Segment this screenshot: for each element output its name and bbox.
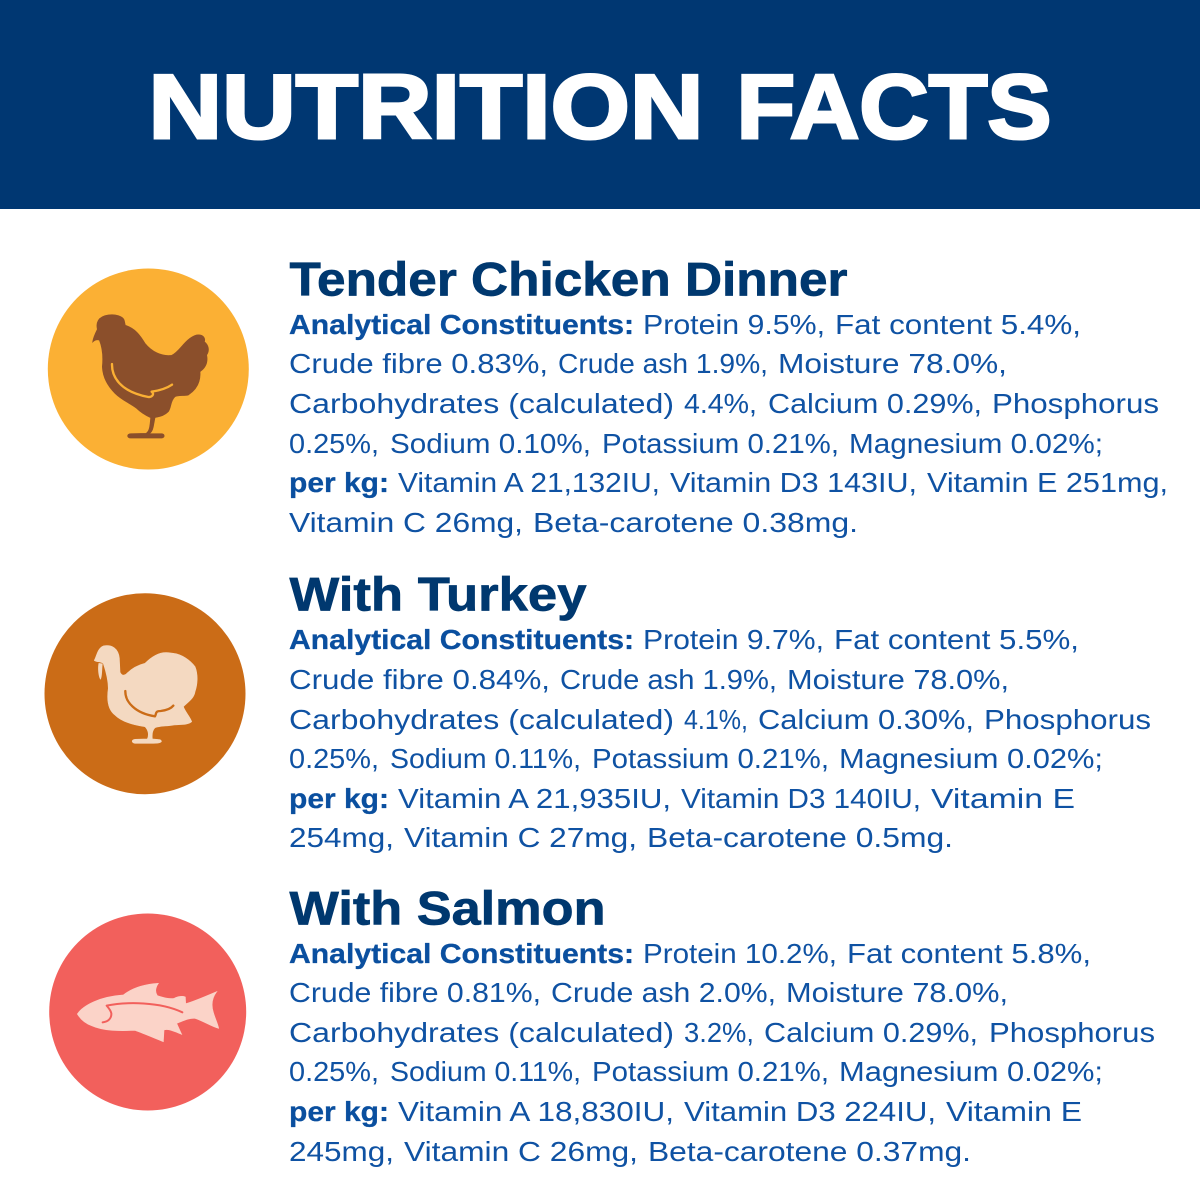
text block: chicken constituents: 4.4%,	[684, 388, 757, 419]
text block: turkey constituents: Vitamin D3 140IU,	[681, 783, 921, 814]
text block: salmon constituents: Calcium 0.29%,	[764, 1017, 978, 1048]
text block: salmon constituents	[289, 938, 1155, 1167]
text block: chicken constituents: Beta-carotene 0.38mg.	[533, 507, 858, 538]
text block: salmon constituents: Potassium 0.21%,	[592, 1056, 829, 1087]
text block: chicken constituents: Vitamin D3 143IU,	[670, 467, 917, 498]
text block: salmon constituents: 3.2%,	[684, 1017, 754, 1048]
text block: salmon constituents: Sodium 0.11%,	[390, 1056, 581, 1087]
text block: turkey constituents: Carbohydrates (calculated)	[289, 704, 674, 735]
text block: chicken constituents: 0.25%,	[289, 428, 379, 459]
text block: turkey constituents: Beta-carotene 0.5mg.	[647, 822, 953, 853]
text block: salmon constituents: Vitamin D3 224IU,	[684, 1096, 936, 1127]
text block: turkey constituents: Phosphorus	[984, 704, 1151, 735]
text block: chicken constituents: Crude ash 1.9%,	[558, 348, 768, 379]
text block: turkey constituents: Vitamin E	[931, 783, 1075, 814]
text block: turkey constituents: Crude fibre 0.84%,	[289, 664, 550, 695]
text block: turkey constituents: Potassium 0.21%,	[592, 743, 829, 774]
title	[148, 57, 1052, 158]
text block: turkey constituents: per kg:	[289, 783, 389, 814]
text block: chicken constituents	[289, 309, 1168, 538]
panel: with turkey	[289, 568, 1151, 853]
text block: turkey constituents: Protein 9.7%,	[643, 624, 824, 655]
title: FACTS	[736, 57, 1052, 158]
text block: turkey constituents: 254mg,	[289, 822, 394, 853]
text block: chicken constituents: Potassium 0.21%,	[602, 428, 839, 459]
text block: turkey constituents: 4.1%,	[684, 704, 748, 735]
icon: salmon	[49, 914, 246, 1110]
text block: chicken constituents: Magnesium 0.02%;	[849, 428, 1103, 459]
text block: turkey constituents: Moisture 78.0%,	[787, 664, 1009, 695]
text block: turkey constituents	[289, 624, 1151, 853]
text block: salmon constituents: Crude ash 2.0%,	[551, 977, 776, 1008]
text block: salmon constituents: Carbohydrates (calculated)	[289, 1017, 674, 1048]
text block: salmon constituents: 0.25%,	[289, 1056, 379, 1087]
panel: tender chicken dinner	[289, 252, 1168, 538]
text block: turkey constituents: 0.25%,	[289, 743, 379, 774]
heading: turkey: With Turkey	[290, 568, 586, 620]
text block: chicken constituents: Vitamin E 251mg,	[927, 467, 1168, 498]
text block: chicken constituents: Crude fibre 0.83%,	[289, 348, 548, 379]
text block: chicken constituents: Vitamin A 21,132IU,	[398, 467, 660, 498]
text block: salmon constituents: per kg:	[289, 1096, 389, 1127]
text block: turkey constituents: Magnesium 0.02%;	[839, 743, 1103, 774]
text block: turkey constituents: Vitamin A 21,935IU,	[398, 783, 671, 814]
text block: chicken constituents: Analytical Constituents:	[289, 309, 634, 340]
text block: turkey constituents: Calcium 0.30%,	[758, 704, 974, 735]
text block: salmon constituents: Vitamin E	[946, 1096, 1082, 1127]
text block: turkey constituents: Vitamin C 27mg,	[404, 822, 637, 853]
text block: chicken constituents: Moisture 78.0%,	[778, 348, 1007, 379]
text block: salmon constituents: 245mg,	[289, 1136, 394, 1167]
heading: chicken: Tender Chicken Dinner	[290, 252, 848, 306]
text block: salmon constituents: Beta-carotene 0.37mg.	[648, 1136, 971, 1167]
text block: turkey constituents: Crude ash 1.9%,	[560, 664, 777, 695]
text block: chicken constituents: Carbohydrates (calculated)	[289, 388, 674, 419]
text block: salmon constituents: Fat content 5.8%,	[847, 938, 1091, 969]
text block: turkey constituents: Fat content 5.5%,	[834, 624, 1079, 655]
header banner	[0, 0, 1200, 209]
panel: with salmon	[289, 882, 1155, 1167]
text block: chicken constituents: Sodium 0.10%,	[390, 428, 591, 459]
text block: chicken constituents: Vitamin C 26mg,	[289, 507, 523, 538]
text block: salmon constituents: Phosphorus	[989, 1017, 1155, 1048]
text block: turkey constituents: Analytical Constituents:	[289, 624, 634, 655]
text block: salmon constituents: Protein 10.2%,	[643, 938, 837, 969]
text block: chicken constituents: Phosphorus	[992, 388, 1159, 419]
icon: chicken	[48, 268, 249, 470]
heading: salmon: With Salmon	[290, 882, 606, 934]
title: NUTRITION	[148, 57, 704, 158]
text block: turkey constituents: Sodium 0.11%,	[390, 743, 581, 774]
text block: chicken constituents: Calcium 0.29%,	[768, 388, 982, 419]
text block: salmon constituents: Crude fibre 0.81%,	[289, 977, 541, 1008]
icon: turkey	[44, 593, 246, 794]
text block: salmon constituents: Analytical Constituents:	[289, 938, 634, 969]
text block: salmon constituents: Vitamin A 18,830IU,	[398, 1096, 674, 1127]
text block: chicken constituents: per kg:	[289, 467, 389, 498]
text block: chicken constituents: Protein 9.5%,	[643, 309, 825, 340]
text block: salmon constituents: Magnesium 0.02%;	[839, 1056, 1103, 1087]
text block: salmon constituents: Vitamin C 26mg,	[404, 1136, 638, 1167]
text block: chicken constituents: Fat content 5.4%,	[835, 309, 1081, 340]
text block: salmon constituents: Moisture 78.0%,	[786, 977, 1008, 1008]
